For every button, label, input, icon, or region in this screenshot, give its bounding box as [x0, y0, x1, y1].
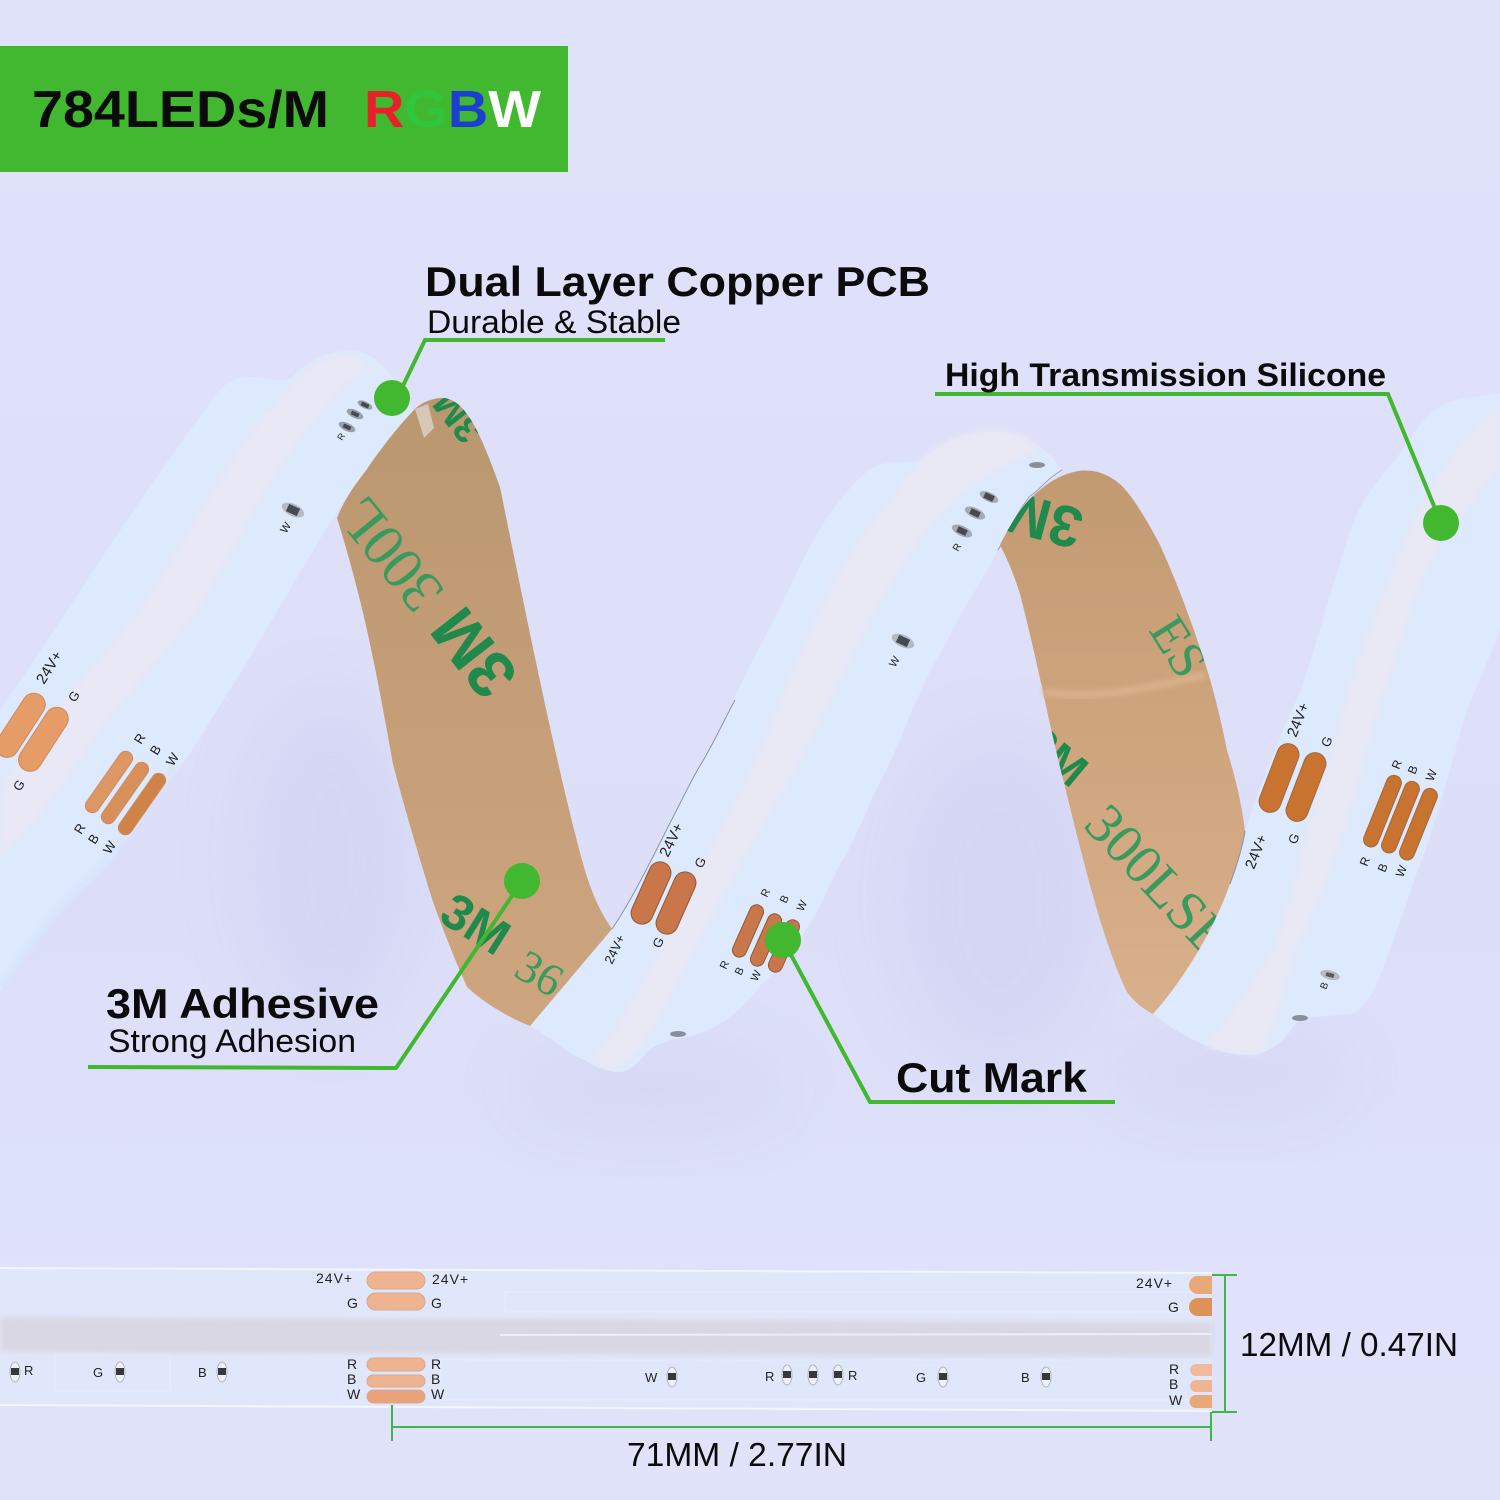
printed labels: R	[24, 1363, 33, 1378]
printed labels: R	[1169, 1361, 1180, 1377]
printed labels: B	[1169, 1376, 1179, 1392]
callout: High Transmission Silicone	[935, 357, 1459, 541]
left strip printed labels: W	[100, 838, 119, 857]
middle strip printed labels: R	[759, 887, 773, 899]
RGBW label: RGBW	[364, 81, 542, 139]
right strip solder pads	[1256, 740, 1440, 862]
end solder pads	[1189, 1276, 1212, 1408]
middle strip printed labels: B	[778, 893, 792, 905]
3M adhesive print: 36	[507, 939, 572, 1007]
3M adhesive print	[347, 398, 564, 995]
printed labels	[24, 1270, 1183, 1408]
callout subtext: Strong Adhesion	[108, 1023, 356, 1059]
printed labels: G	[916, 1370, 926, 1385]
height dimension	[1212, 1275, 1458, 1412]
callout heading: Cut Mark	[896, 1054, 1088, 1101]
centre solder pads	[367, 1272, 425, 1403]
callout heading: 3M Adhesive	[106, 980, 379, 1027]
printed labels: W	[1169, 1392, 1183, 1408]
3M adhesive print: 3M	[995, 478, 1089, 561]
middle strip printed labels: R	[951, 542, 964, 554]
3M adhesive print: 300LSE	[1072, 793, 1243, 969]
callout: Cut Mark	[765, 922, 1115, 1102]
right strip printed labels: W	[1423, 767, 1440, 783]
right strip LEDs	[1292, 968, 1341, 1021]
printed labels: 24V+	[1136, 1275, 1173, 1291]
middle strip printed labels: B	[733, 965, 747, 977]
right strip printed labels: R	[1357, 855, 1373, 868]
printed labels: 24V+	[316, 1270, 353, 1286]
middle strip printed labels: 24V+	[601, 932, 628, 966]
printed labels: W	[347, 1386, 361, 1402]
middle strip printed labels: R	[718, 959, 732, 971]
printed labels: R	[765, 1369, 774, 1384]
printed labels: G	[431, 1295, 443, 1311]
middle strip printed labels: W	[749, 968, 765, 983]
right strip printed labels: B	[1405, 763, 1421, 776]
printed labels: W	[431, 1386, 445, 1402]
left strip solder pads	[0, 689, 168, 838]
left strip LEDs	[280, 398, 374, 521]
adhesive back, right loop	[995, 470, 1245, 1014]
3M adhesive print: 3M	[1016, 716, 1098, 797]
3M adhesive print: 3M	[431, 882, 520, 966]
3M adhesive print	[1007, 496, 1216, 951]
LED chips	[10, 1362, 1051, 1387]
middle strip printed labels: W	[887, 654, 903, 670]
callout heading: High Transmission Silicone	[945, 357, 1386, 393]
printed labels: W	[645, 1370, 658, 1385]
callout: 3M Adhesive	[88, 863, 540, 1068]
printed labels: G	[347, 1295, 359, 1311]
printed labels: G	[1168, 1299, 1180, 1315]
header banner	[0, 46, 568, 172]
right strip printed labels: R	[1389, 758, 1405, 771]
right strip printed labels: 24V+	[1284, 700, 1313, 739]
right strip printed labels: B	[1375, 861, 1391, 874]
middle strip printed labels: G	[691, 855, 709, 870]
left strip printed labels: 24V+	[33, 648, 66, 687]
printed labels: R	[848, 1368, 857, 1383]
middle strip LEDs	[670, 462, 1045, 1037]
left strip printed labels: B	[147, 742, 164, 758]
middle strip printed labels	[601, 542, 964, 983]
printed labels: R	[347, 1356, 358, 1372]
width label: 71MM / 2.77IN	[627, 1436, 847, 1473]
callout subtext: Durable & Stable	[427, 304, 681, 340]
left strip printed labels: W	[163, 750, 182, 769]
callout: Dual Layer Copper PCB	[374, 258, 930, 416]
adhesive back, left loop	[325, 383, 612, 1026]
right strip printed labels: W	[1393, 863, 1410, 879]
printed labels: 24V+	[432, 1271, 469, 1287]
left strip printed labels: R	[335, 431, 347, 442]
height label: 12MM / 0.47IN	[1240, 1326, 1458, 1363]
flat strip dimension view	[0, 1268, 1212, 1411]
left strip printed labels: W	[278, 520, 294, 536]
left strip printed labels	[10, 431, 347, 857]
right strip printed labels: 24V+	[1242, 832, 1271, 871]
middle strip printed labels: 24V+	[656, 820, 687, 860]
right strip printed labels: G	[1318, 734, 1336, 749]
background shadows	[240, 690, 1350, 1130]
printed labels: G	[93, 1365, 103, 1380]
circuit trace pattern	[55, 1292, 1210, 1400]
silicone centre band	[0, 1317, 1212, 1357]
right strip printed labels	[1242, 700, 1440, 991]
3M adhesive print: ES	[1138, 606, 1218, 688]
printed labels: R	[431, 1356, 442, 1372]
width dimension	[392, 1405, 1211, 1473]
LED strip wave photo	[0, 351, 1500, 1072]
middle strip ribbon	[530, 431, 1062, 1072]
3M adhesive print: 3M	[416, 594, 531, 712]
right strip ribbon	[1153, 393, 1500, 1055]
3M adhesive print: 300L	[325, 485, 456, 625]
right strip printed labels: B	[1319, 981, 1331, 991]
left strip printed labels: G	[10, 777, 28, 794]
middle strip printed labels: W	[795, 898, 811, 913]
callout heading: Dual Layer Copper PCB	[425, 258, 930, 305]
left strip printed labels: R	[131, 731, 149, 747]
left strip ribbon	[0, 351, 413, 992]
left strip printed labels: G	[65, 688, 83, 705]
printed labels: B	[431, 1371, 441, 1387]
banner title: 784LEDs/M	[32, 81, 329, 139]
printed labels: B	[198, 1365, 207, 1380]
left strip printed labels: B	[85, 831, 102, 847]
3M adhesive print: 3M	[425, 383, 491, 450]
left strip printed labels: R	[71, 821, 89, 837]
middle strip printed labels: G	[649, 935, 667, 950]
printed labels: B	[1021, 1370, 1030, 1385]
printed labels: B	[347, 1371, 357, 1387]
right strip printed labels: G	[1285, 831, 1303, 846]
middle strip solder pads	[628, 858, 802, 974]
